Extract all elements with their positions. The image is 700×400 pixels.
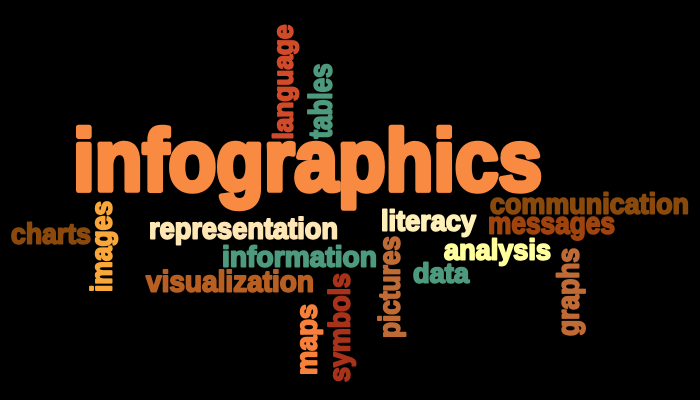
title word: infographics: infographics	[73, 113, 542, 209]
word: tables: tables	[302, 64, 338, 138]
word: charts: charts	[11, 218, 91, 250]
word: data: data	[413, 258, 469, 288]
word: information: information	[222, 242, 377, 274]
word: visualization: visualization	[146, 266, 314, 298]
word: symbols: symbols	[324, 273, 356, 382]
word: language: language	[268, 24, 298, 140]
word: maps: maps	[290, 304, 324, 375]
word: graphs: graphs	[550, 248, 586, 336]
word: images: images	[86, 201, 118, 292]
word: pictures: pictures	[374, 236, 406, 338]
word: literacy: literacy	[381, 206, 476, 238]
word: messages: messages	[488, 206, 615, 240]
word: representation: representation	[149, 212, 338, 246]
word: communication: communication	[490, 188, 689, 220]
word: analysis: analysis	[444, 234, 551, 266]
